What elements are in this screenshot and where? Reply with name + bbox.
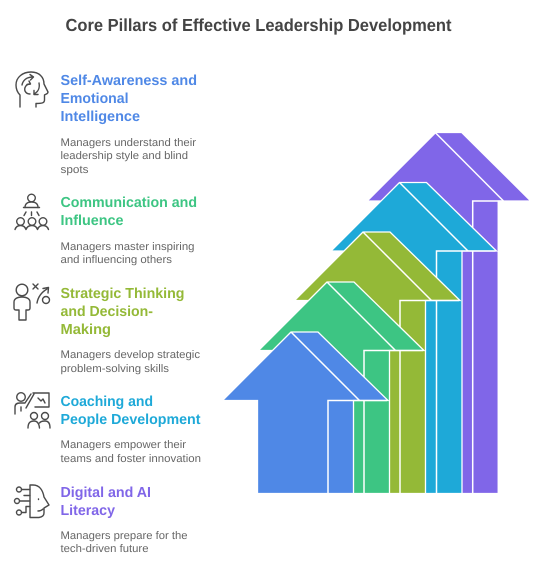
heading: Intelligence (60, 109, 140, 125)
heading: Coaching and (60, 394, 153, 410)
arrow: strategic thinking (294, 232, 460, 494)
heading: Self-Awareness and (60, 73, 197, 89)
description (60, 137, 196, 176)
description: Managers prepare for the (60, 530, 188, 542)
description: Managers master inspiring (60, 241, 194, 253)
arrow: digital and AI literacy (367, 132, 531, 494)
description (60, 530, 188, 555)
description (60, 439, 201, 465)
icon: AI head with circuits (14, 485, 49, 518)
heading: and Decision- (60, 304, 153, 320)
heading: Making (60, 322, 111, 338)
heading: Influence (60, 213, 124, 229)
heading: Literacy (60, 503, 115, 519)
title: Core Pillars of Effective Leadership Development (66, 15, 452, 35)
icon: person with strategy play (14, 284, 50, 320)
heading: Strategic Thinking (60, 286, 184, 302)
panel: coaching and people development (15, 393, 201, 465)
heading (60, 73, 197, 125)
heading (60, 394, 201, 428)
arrow: coaching and people development (331, 182, 496, 494)
panel: communication and influence (15, 194, 197, 266)
panel: strategic thinking and decision-making (14, 284, 201, 375)
heading: People Development (60, 412, 201, 428)
panel: digital and AI literacy (14, 485, 188, 555)
description: Managers develop strategic (60, 349, 201, 361)
panel: self-awareness and emotional intelligence (16, 72, 197, 176)
description: Managers empower their (60, 439, 186, 451)
heading (60, 195, 197, 229)
heading: Emotional (60, 91, 128, 107)
icon: coach at board with team (15, 393, 50, 428)
staircase of arrows chart (222, 132, 531, 494)
arrow: self-awareness (222, 332, 388, 494)
description: spots (60, 164, 89, 176)
heading: Digital and AI (60, 485, 151, 501)
heading: Communication and (60, 195, 197, 211)
heading (60, 485, 151, 519)
icon: speaker and audience (15, 194, 48, 230)
description: problem-solving skills (60, 363, 170, 375)
heading (60, 286, 184, 338)
description: leadership style and blind (60, 150, 188, 162)
description (60, 241, 194, 266)
description: teams and foster innovation (60, 453, 201, 465)
description: Managers understand their (60, 137, 196, 149)
description: tech-driven future (60, 543, 148, 555)
arrow: communication and influence (258, 282, 424, 494)
description (60, 349, 201, 375)
description: and influencing others (60, 254, 173, 266)
icon: head with circular arrows (16, 72, 48, 107)
